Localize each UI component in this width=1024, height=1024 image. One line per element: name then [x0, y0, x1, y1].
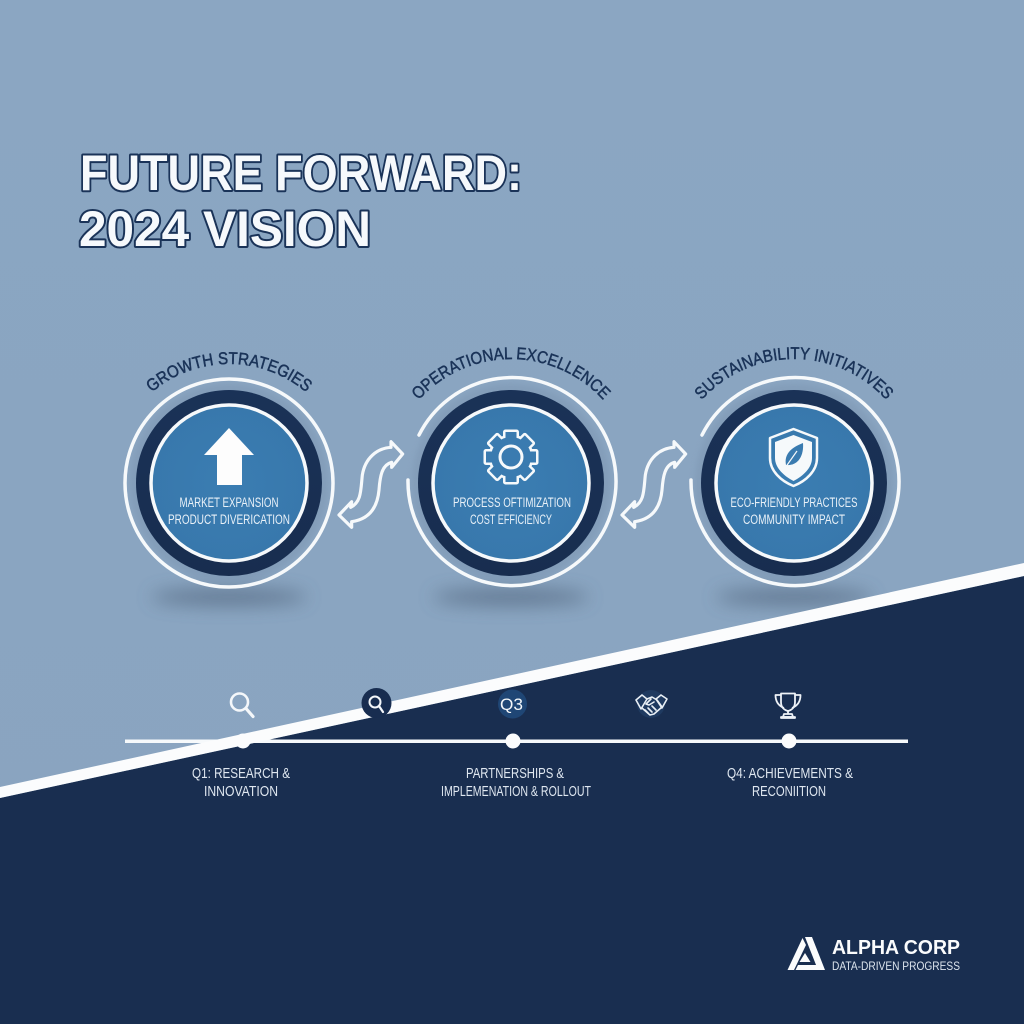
logo: Alpha Corp [788, 937, 960, 973]
text: sustainability items [730, 495, 858, 527]
diagonal band [0, 563, 1024, 798]
dark ring [136, 390, 322, 576]
heading: operational excellence: OPERATIONAL EXCELLENCE [412, 347, 612, 400]
dark lower section [0, 576, 1024, 1024]
panel: operational excellence [406, 347, 618, 614]
title: 2024 VISION [79, 201, 371, 257]
text: growth items: MARKET EXPANSION [180, 495, 278, 510]
text: Q4 label [727, 765, 853, 800]
text: Q2 Q3 label [441, 765, 591, 800]
text: company name: ALPHA CORP [832, 937, 960, 959]
text: Q2 Q3 label: PARTNERSHIPS & [466, 765, 564, 782]
text: tagline: DATA-DRIVEN PROGRESS [832, 961, 960, 973]
text: operations items: COST EFFICIENCY [470, 512, 552, 527]
arrow: growth to operations [339, 442, 403, 527]
text: operations items: PROCESS OFTIMIZATION [453, 495, 571, 510]
text: sustainability items: ECO-FRIENDLY PRACTICES [730, 495, 858, 510]
title [79, 145, 522, 257]
icon: logo mark [788, 937, 825, 970]
panel: growth strategies [123, 352, 335, 614]
timeline line [125, 740, 908, 743]
heading: sustainability initiatives: SUSTAINABILITY INITIATIVES [695, 347, 894, 398]
icon: up arrow [204, 428, 254, 485]
panel: timeline [0, 563, 1024, 800]
dark ring [701, 390, 887, 576]
inner disc [433, 405, 589, 561]
outer ring with gap [691, 378, 899, 586]
icon: magnifier Q1 [231, 694, 253, 716]
text: sustainability items: COMMUNITY IMPACT [743, 512, 845, 527]
arrow: operations to sustainability [622, 442, 686, 527]
inner disc [716, 405, 872, 561]
heading: growth strategies: GROWTH STRATEGIES [146, 352, 312, 391]
title: FUTURE FORWARD: [80, 145, 522, 201]
text: operations items [453, 495, 571, 527]
text: Q2 Q3 label: IMPLEMENATION & ROLLOUT [441, 783, 591, 800]
icon: trophy [776, 694, 800, 718]
icon: magnifier badge [362, 688, 392, 718]
text: growth items [168, 495, 290, 527]
icon: handshake [636, 690, 667, 718]
text: Q4 label: RECONIITION [752, 783, 826, 800]
text: growth items: PRODUCT DIVERICATION [168, 512, 290, 527]
icon: shield with leaf [770, 429, 817, 486]
icon: gear [486, 432, 536, 482]
text: Q1 label: INNOVATION [204, 783, 278, 800]
icon: Q3 badge [498, 690, 527, 718]
text: Q1 label [192, 765, 290, 800]
outer ring with gap [408, 378, 616, 586]
panel: sustainability initiatives [689, 347, 901, 614]
icon: Q3 badge: Q3 [500, 695, 523, 714]
outer ring [125, 379, 333, 587]
inner disc [151, 405, 307, 561]
text: Q1 label: Q1: RESEARCH & [192, 765, 290, 782]
dark ring [418, 390, 604, 576]
timeline dots [236, 734, 796, 748]
text: Q4 label: Q4: ACHIEVEMENTS & [727, 765, 853, 782]
